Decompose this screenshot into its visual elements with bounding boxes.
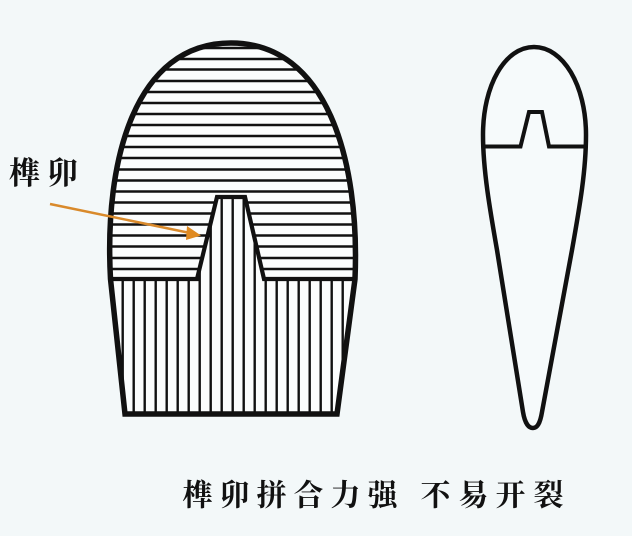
label: second character: 卯 (47, 156, 78, 191)
horizontal grain section (100, 48, 360, 269)
tenon joint line (484, 112, 585, 146)
arrow pointing to tenon (50, 204, 201, 240)
right diagram: cross-section wedge (483, 47, 586, 428)
caption continuation: 不易开裂 (420, 480, 564, 512)
tenon outline (110, 197, 355, 279)
vertical grain section (123, 197, 343, 414)
tenon fill (197, 197, 264, 279)
left diagram: joined board with mortise and tenon (100, 43, 360, 414)
label: mortise and tenon: 榫 (9, 156, 40, 191)
caption: 榫卯拼合力强 (182, 480, 400, 512)
outer outline (110, 43, 355, 414)
